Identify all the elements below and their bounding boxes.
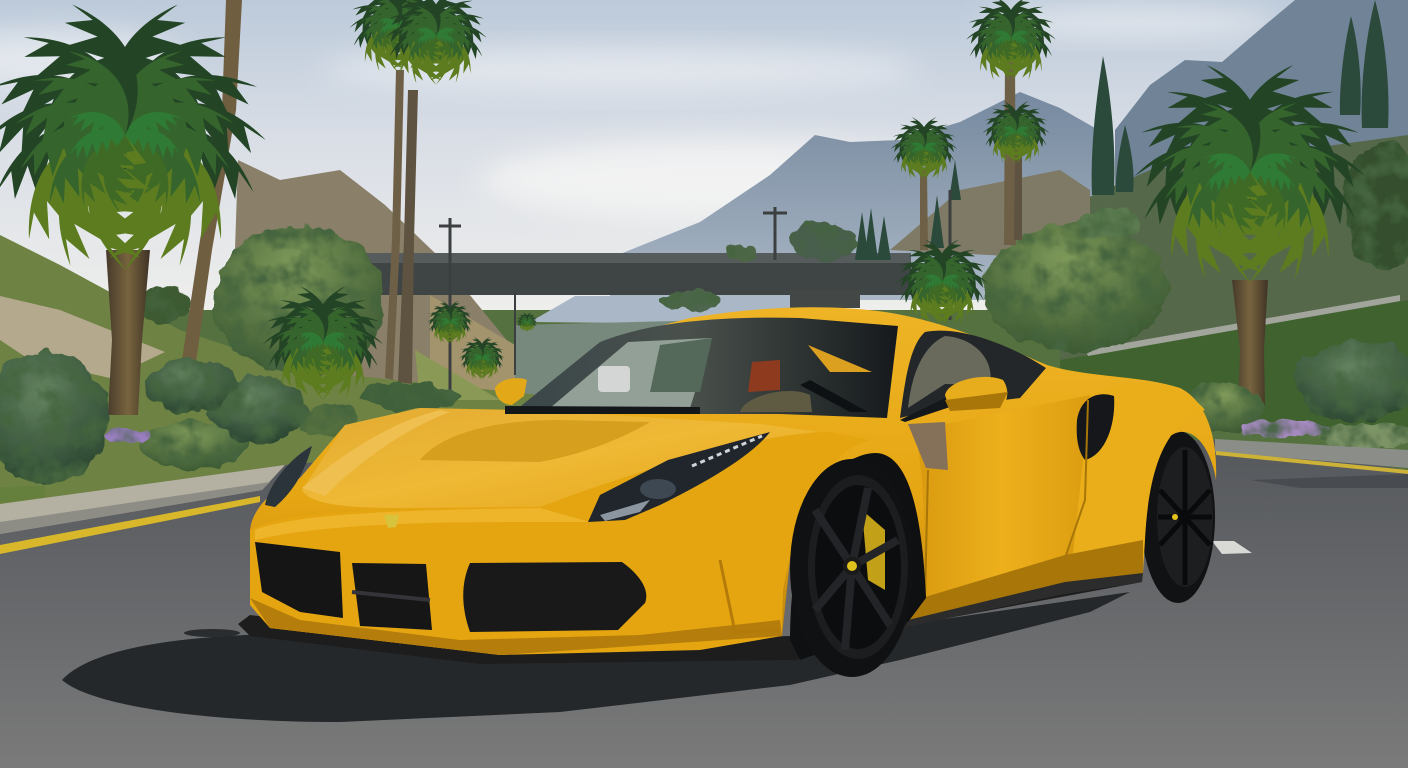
front wheel bbox=[790, 459, 914, 677]
lower bumper shade bbox=[250, 598, 782, 655]
door seam bbox=[925, 400, 1088, 598]
front splitter bbox=[238, 575, 1142, 664]
reflected palms bbox=[650, 338, 712, 392]
left grass slope bbox=[0, 235, 540, 505]
right curb and lane line bbox=[1215, 439, 1408, 488]
right headlight bbox=[588, 432, 770, 522]
left curb and lane line bbox=[0, 465, 285, 554]
hood crease highlight bbox=[302, 410, 450, 496]
tall background palms bbox=[349, 0, 1057, 181]
sky bbox=[0, 0, 1408, 310]
windshield view bbox=[550, 338, 712, 408]
left headlight bbox=[265, 446, 312, 507]
cypress trees bbox=[855, 0, 1388, 260]
hood scoop bbox=[420, 420, 650, 462]
wheel hub bbox=[843, 557, 861, 575]
rounded trees bbox=[140, 140, 1408, 376]
car bbox=[238, 307, 1216, 677]
bridge bbox=[366, 253, 911, 308]
road bbox=[0, 440, 1408, 768]
car shadow bbox=[62, 592, 1130, 722]
lane dash bbox=[1212, 541, 1252, 554]
small palms mid-ground bbox=[262, 237, 989, 401]
grille bar bbox=[352, 592, 430, 600]
left mirror bbox=[495, 378, 527, 405]
main right palm bbox=[1133, 59, 1367, 405]
left rocky hill bbox=[230, 160, 515, 400]
rear haunch bbox=[1070, 383, 1205, 582]
wheel spokes bbox=[815, 488, 898, 650]
cabin interior bbox=[505, 345, 872, 414]
left grille bbox=[255, 542, 343, 618]
hood bbox=[302, 408, 820, 508]
door badge shadow bbox=[908, 422, 948, 470]
side panel highlight bbox=[915, 395, 1090, 600]
front fender bbox=[250, 432, 870, 655]
bumper highlight bbox=[255, 508, 590, 540]
roadside shrubs bbox=[0, 342, 1408, 484]
front side vent line bbox=[720, 560, 778, 632]
back palm trunks bbox=[182, 0, 1022, 384]
side window reflection bbox=[908, 336, 991, 408]
main left palm bbox=[0, 0, 268, 415]
right mirror bbox=[900, 377, 1008, 422]
front wheel arch bbox=[790, 453, 926, 660]
rear wheel bbox=[1141, 431, 1215, 603]
side window bbox=[900, 331, 1046, 418]
front badge bbox=[384, 515, 399, 528]
side skirt bbox=[905, 573, 1143, 627]
right grille bbox=[463, 562, 646, 632]
utility poles bbox=[439, 190, 950, 395]
distant mountains bbox=[530, 0, 1408, 325]
brake caliper bbox=[862, 510, 885, 590]
lower door shade bbox=[908, 540, 1143, 622]
distant valley bbox=[515, 318, 800, 400]
side air intake bbox=[1077, 394, 1114, 460]
windshield bbox=[516, 318, 898, 418]
center grille bbox=[352, 563, 432, 630]
midground green base bbox=[0, 310, 1408, 480]
right hillside bbox=[890, 135, 1408, 440]
car body bbox=[250, 307, 1216, 655]
